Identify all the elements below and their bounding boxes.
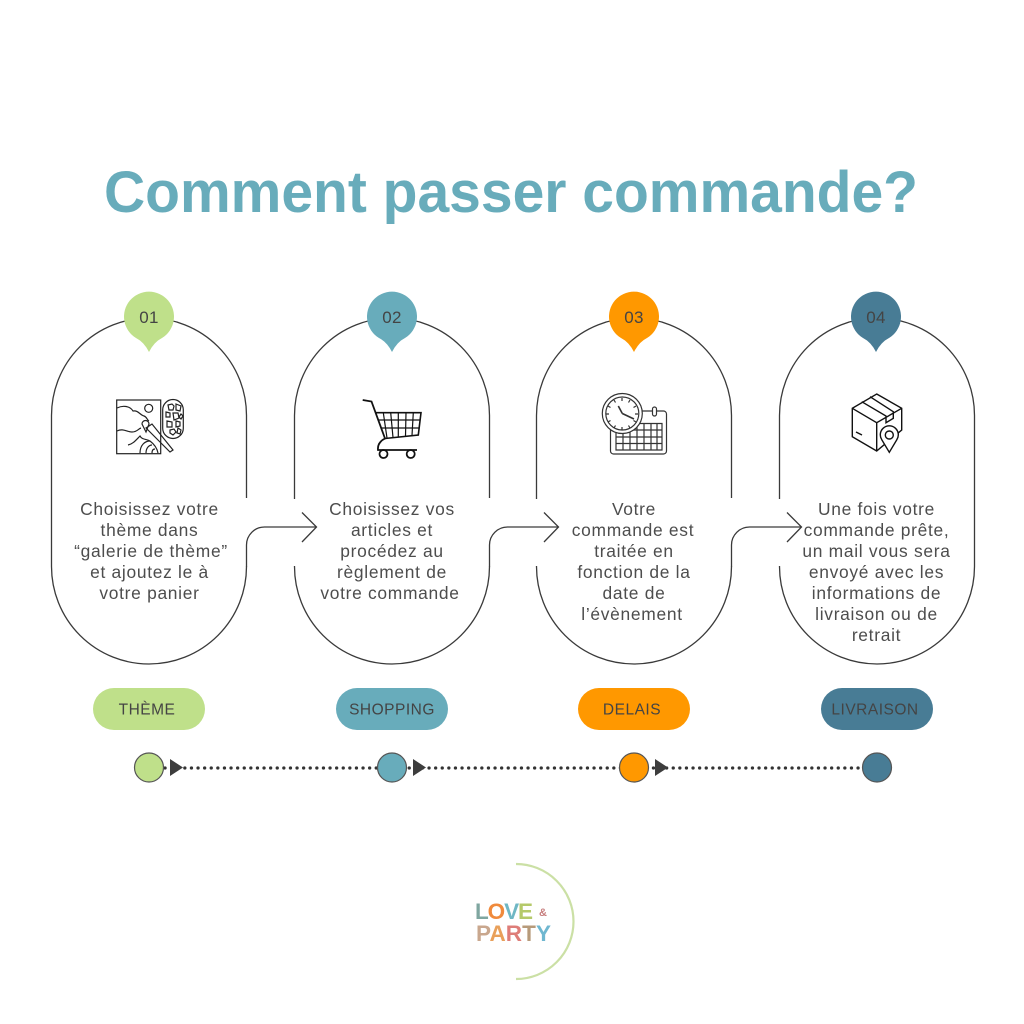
text step 3: Votre: [612, 499, 656, 519]
text step 3: l’évènement: [581, 604, 683, 624]
label: livraison: LIVRAISON: [831, 702, 919, 718]
text step 4: informations de: [812, 583, 941, 603]
arrowhead 3: [655, 759, 668, 776]
panel: step 2 shopping: [294, 292, 490, 664]
text step 1: votre panier: [99, 583, 200, 603]
text step 3: commande est: [572, 520, 694, 540]
label: livraison: [821, 688, 933, 730]
title: Comment passer commande?: [104, 160, 918, 225]
capsule outline 1: [52, 318, 246, 664]
capsule outline 4: [780, 318, 974, 664]
pin 01: [124, 292, 174, 352]
marker 3: [620, 753, 648, 782]
text step 2: [320, 499, 460, 603]
pin 01: 01: [139, 308, 159, 327]
text step 1: “galerie de thème”: [74, 541, 228, 561]
text step 3: traitée en: [594, 541, 674, 561]
text step 4: [802, 499, 951, 645]
text step 2: articles et: [351, 520, 433, 540]
pin 02: 02: [382, 308, 402, 327]
text step 1: [74, 499, 228, 603]
label: shopping: SHOPPING: [349, 702, 435, 718]
pin 03: [609, 292, 659, 352]
icon: shopping cart: [363, 400, 421, 458]
arrow: step 2 to 3: [490, 512, 558, 567]
logo ampersand: &: [539, 907, 547, 919]
text step 2: Choisissez vos: [329, 499, 455, 519]
text step 1: thème dans: [101, 520, 198, 540]
panel: step 3 delais: [536, 292, 732, 664]
text step 3: date de: [603, 583, 665, 603]
label: delais: [578, 688, 690, 730]
capsule outline 3: [536, 318, 732, 664]
label: theme: THÈME: [119, 702, 175, 718]
text step 3: [572, 499, 694, 624]
text step 4: retrait: [852, 625, 901, 645]
timeline: [134, 753, 892, 782]
arrow: step 1 to 2: [246, 512, 316, 567]
pin 04: 04: [866, 308, 886, 327]
logo wordmark second line: PARTY: [476, 921, 551, 946]
icon: parcel with location marker: [852, 394, 902, 452]
logo wordmark: LOVE: [475, 899, 533, 924]
text step 1: Choisissez votre: [80, 499, 219, 519]
text step 4: un mail vous sera: [802, 541, 951, 561]
text step 2: votre commande: [320, 583, 460, 603]
pin 02: [367, 292, 417, 352]
text step 4: commande prête,: [804, 520, 949, 540]
logo arc: [516, 864, 573, 979]
label: delais: DELAIS: [603, 702, 661, 718]
marker 1: [134, 753, 164, 782]
label: shopping: [336, 688, 448, 730]
arrowhead 1: [170, 759, 183, 776]
panel: step 4 livraison: [780, 292, 974, 664]
label: theme: [93, 688, 205, 730]
text step 2: procédez au: [340, 541, 444, 561]
icon: clock and calendar: [602, 394, 666, 454]
pin 04: [851, 292, 901, 352]
text step 4: envoyé avec les: [809, 562, 944, 582]
capsule outline 2: [294, 318, 490, 664]
text step 3: fonction de la: [577, 562, 691, 582]
arrow: step 3 to 4: [732, 512, 802, 567]
logo: [475, 864, 573, 979]
marker 2: [378, 753, 406, 782]
marker 4: [862, 753, 892, 782]
text step 1: et ajoutez le à: [90, 562, 209, 582]
icon: painting and palette: [117, 400, 183, 454]
pin 03: 03: [624, 308, 644, 327]
text step 4: livraison ou de: [815, 604, 938, 624]
text step 4: Une fois votre: [818, 499, 935, 519]
text step 2: règlement de: [337, 562, 447, 582]
arrowhead 2: [413, 759, 426, 776]
panel: step 1 theme: [52, 292, 246, 664]
